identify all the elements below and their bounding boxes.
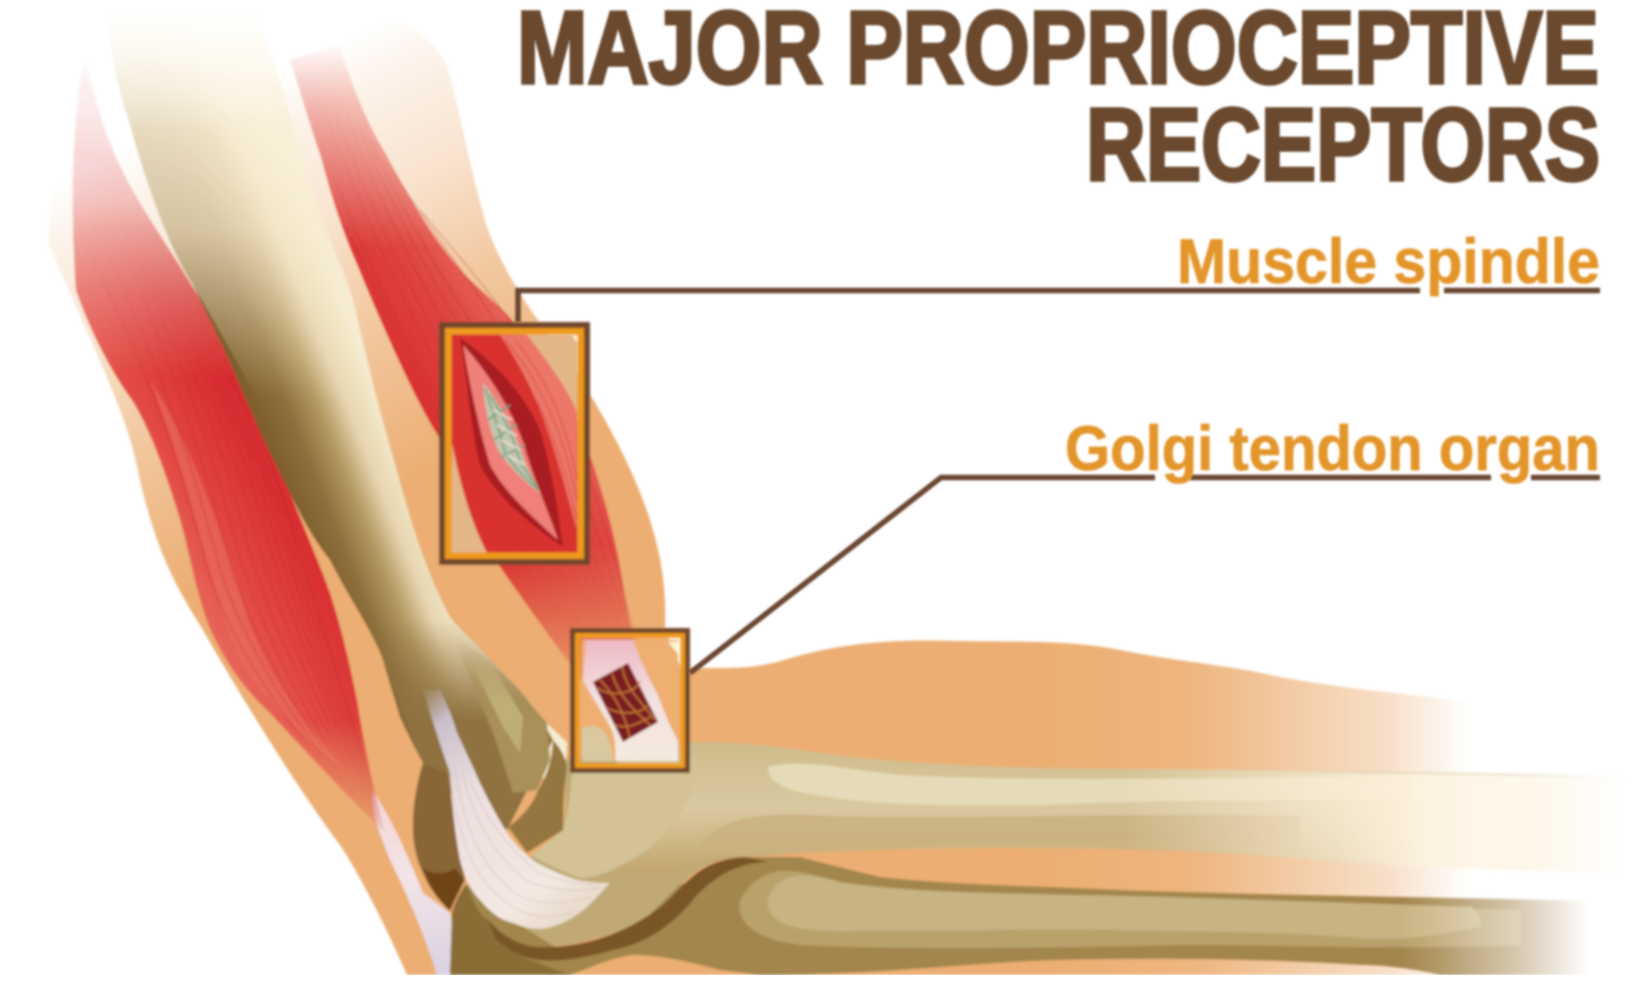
label: muscle spindle: Muscle spindle — [1177, 227, 1600, 297]
muscle: triceps tendon — [372, 790, 462, 975]
leader line: golgi tendon organ — [690, 478, 1600, 673]
leader line: muscle spindle — [518, 290, 1600, 322]
upper arm skin — [48, 10, 690, 975]
title — [517, 0, 1600, 202]
white strip below illustration — [0, 975, 1647, 987]
bone: humerus — [107, 10, 567, 790]
forearm skin — [620, 641, 1500, 975]
bone: ulna forearm — [450, 857, 1640, 975]
golgi: organ — [593, 663, 658, 742]
muscle spindle inset — [442, 325, 587, 562]
spindle: opening — [460, 338, 563, 547]
golgi tendon organ inset — [572, 630, 688, 770]
bone: olecranon — [450, 884, 570, 975]
bone: dark condyle — [413, 763, 465, 910]
label: golgi tendon organ: Golgi tendon organ — [1065, 414, 1600, 484]
golgi: frame — [576, 634, 684, 766]
muscle: biceps — [290, 44, 640, 690]
bone: humerus condyle band — [508, 740, 567, 853]
bone: joint centre — [500, 742, 800, 946]
spindle: receptor — [483, 383, 540, 493]
muscle: triceps — [73, 55, 384, 831]
bone: radius forearm — [600, 742, 1640, 872]
bone: humerus lower end tones — [372, 618, 553, 830]
bone: dark band under olecranon — [487, 857, 770, 961]
tendon: brachialis white band — [423, 690, 610, 929]
bone: joint highlight — [532, 755, 697, 878]
spindle: frame — [448, 331, 581, 556]
